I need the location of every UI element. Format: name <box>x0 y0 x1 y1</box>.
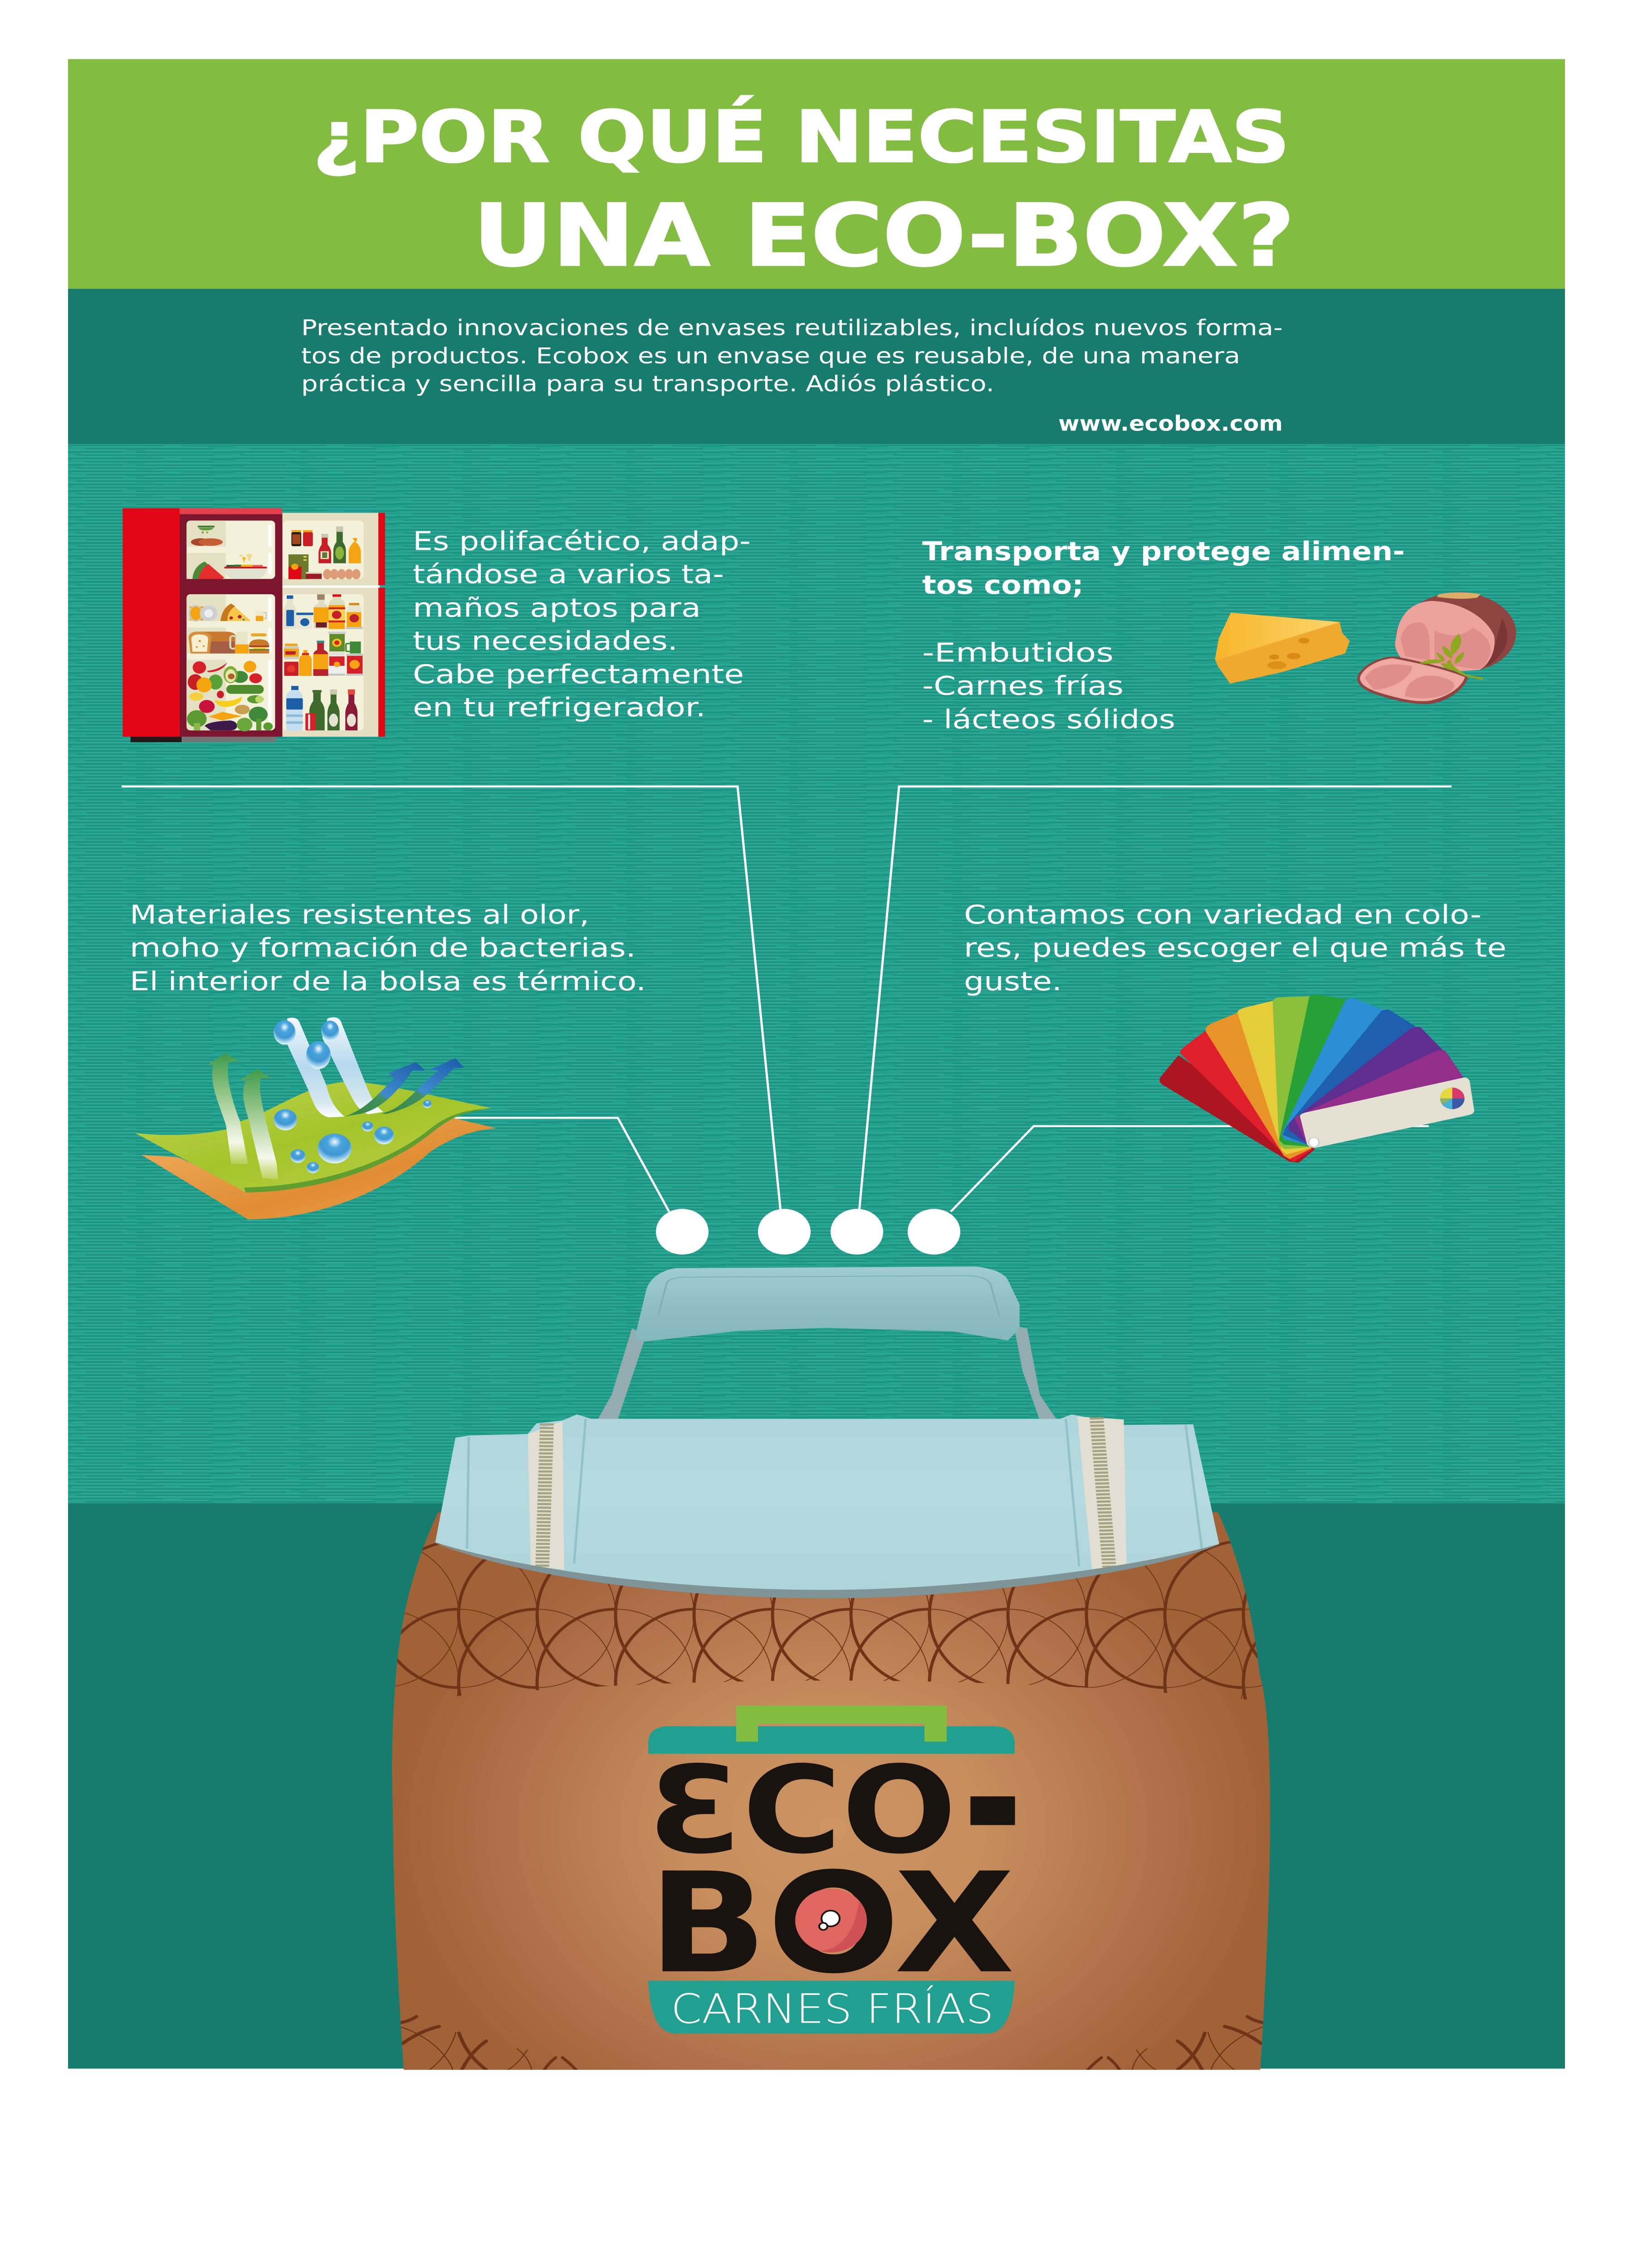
icon: breathable fabric layers <box>135 1017 497 1219</box>
text: materials: moho y formación de bacterias. <box>130 933 636 963</box>
title: ¿POR QUÉ NECESITAS <box>313 95 1290 178</box>
intro text <box>301 316 1283 397</box>
icon: ham <box>1357 592 1516 704</box>
logo: teal label <box>648 1981 1015 2033</box>
text: adaptable sizes: tus necesidades. <box>413 626 678 656</box>
illustration: open refrigerator <box>122 508 385 742</box>
icon: cheese <box>1215 613 1350 684</box>
text: colors: Contamos con variedad en colo- <box>964 899 1481 930</box>
icon: color swatch fan <box>1159 995 1474 1163</box>
text: adaptable sizes: tándose a varios ta- <box>413 559 724 590</box>
text: transports and protects foods: -Embutidos <box>922 638 1114 668</box>
logo: ECO wordmark: ƐCO <box>648 1741 957 1881</box>
text: adaptable sizes: maños aptos para <box>413 593 701 623</box>
title: UNA ECO-BOX? <box>473 186 1295 285</box>
intro text: tos de productos. Ecobox es un envase que es reusable, de una manera <box>301 343 1240 369</box>
text: transports and protects foods <box>922 536 1405 734</box>
logo: teal lid <box>648 1726 1015 1754</box>
text: colors <box>964 899 1506 997</box>
connector dots <box>656 1209 960 1255</box>
text: adaptable sizes: en tu refrigerador. <box>413 692 706 723</box>
bag: handle <box>635 1266 1020 1342</box>
text: materials <box>130 899 646 997</box>
text: materials: Materiales resistentes al olor, <box>130 899 589 930</box>
logo: hyphen: - <box>963 1682 1023 1917</box>
intro text: Presentado innovaciones de envases reutilizables, incluídos nuevos forma- <box>301 316 1283 341</box>
text: transports and protects foods: - lácteos sólidos <box>922 704 1175 734</box>
panel: bottom dark band <box>68 1503 1565 2068</box>
text: transports and protects foods: -Carnes frías <box>922 671 1124 701</box>
logo: green handle <box>736 1706 947 1741</box>
website: www.ecobox.com <box>1058 411 1283 436</box>
intro text: práctica y sencilla para su transporte. Adiós plástico. <box>301 371 994 397</box>
bag: grey lining strip <box>434 1543 1220 1598</box>
logo: ECO-BOX Carnes Frías <box>648 1682 1023 2033</box>
logo: label text: CARNES FRÍAS <box>671 1985 994 2033</box>
text: transports and protects foods: tos como; <box>922 570 1084 600</box>
logo: BOX wordmark: BOX <box>648 1843 1015 2004</box>
text: colors: res, puedes escoger el que más te <box>964 933 1506 963</box>
bag: handle straps <box>597 1325 1057 1420</box>
text: adaptable sizes: Es polifacético, adap- <box>413 526 751 557</box>
panel: textured teal background <box>68 444 1565 1503</box>
text: adaptable sizes <box>413 526 751 723</box>
text: adaptable sizes: Cabe perfectamente <box>413 659 744 689</box>
logo: meat icon <box>795 1888 867 1952</box>
title <box>313 95 1295 285</box>
text: transports and protects foods: Transporta y protege alimen- <box>922 536 1405 567</box>
text: colors: guste. <box>964 966 1062 997</box>
text: materials: El interior de la bolsa es térmico. <box>130 966 646 997</box>
panel: intro band <box>68 289 1565 444</box>
connector lines <box>122 787 1452 1212</box>
panel: green title band <box>68 59 1565 289</box>
bag: blue top compartment <box>434 1414 1220 1598</box>
bag: brown body <box>390 1512 1275 2070</box>
